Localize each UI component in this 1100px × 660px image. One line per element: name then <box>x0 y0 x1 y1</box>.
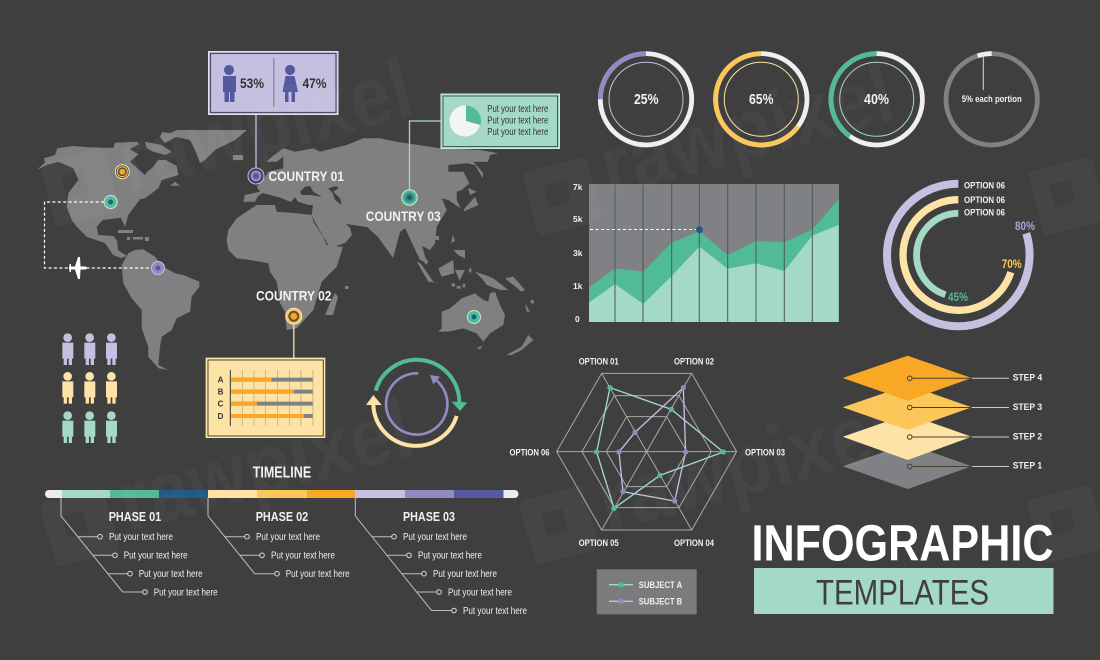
text: note lines: Put your text here <box>487 104 549 115</box>
label: country 02: COUNTRY 02 <box>256 288 332 304</box>
phase 01 <box>61 498 218 598</box>
panel: people pictograms <box>62 333 117 443</box>
labels: categories <box>218 376 224 421</box>
radar labels <box>510 356 785 548</box>
phase 03: Put your text here <box>448 586 512 598</box>
marker: green north america <box>104 196 117 208</box>
banner: templates: TEMPLATES <box>816 574 989 612</box>
stacked steps diagram: STEP 2 <box>1013 431 1042 442</box>
title: infographic: INFOGRAPHIC <box>752 514 1054 572</box>
text: note lines: Put your text here <box>487 127 549 138</box>
radial progress chart: OPTION 06 <box>964 180 1005 190</box>
chart: pie <box>450 106 481 136</box>
radar legend: SUBJECT A <box>639 580 683 590</box>
phase 03: PHASE 03 <box>403 509 455 524</box>
axis labels: 3k <box>573 248 583 258</box>
labels: categories: B <box>218 388 224 397</box>
series: subject A <box>594 385 726 511</box>
phase 01: Put your text here <box>124 550 188 562</box>
banner: templates <box>754 568 1054 614</box>
phase 02: Put your text here <box>271 550 335 562</box>
text: note lines <box>487 104 549 138</box>
label: country 03: COUNTRY 03 <box>366 208 441 224</box>
radar labels: OPTION 02 <box>674 356 714 366</box>
axis labels: 5k <box>573 214 583 224</box>
panel: bar chart <box>206 358 325 438</box>
marker: australia <box>468 310 480 324</box>
donut: 40 percent <box>831 54 922 145</box>
text: female share: 47% <box>302 75 327 91</box>
donut: 65 percent <box>716 54 807 145</box>
labels: categories: A <box>218 376 224 385</box>
timeline bar <box>45 490 518 498</box>
phase 02: PHASE 02 <box>256 509 308 524</box>
labels: categories: C <box>218 400 224 409</box>
radar labels: OPTION 04 <box>674 538 714 548</box>
watermark <box>33 41 1100 570</box>
marker: yellow north america <box>115 165 129 179</box>
phase 03 <box>355 498 527 617</box>
donut: 5 percent portion <box>946 54 1037 145</box>
stacked steps diagram: STEP 4 <box>1013 373 1043 384</box>
phase 03: Put your text here <box>403 531 467 543</box>
watermark: rawpixel <box>108 381 422 550</box>
radial progress chart: 70% <box>1002 257 1022 271</box>
panel: gender split <box>208 52 338 114</box>
phase 01: Put your text here <box>109 531 173 543</box>
radar labels: OPTION 03 <box>745 447 785 457</box>
icon: airplane <box>69 257 87 279</box>
phase 01: Put your text here <box>154 586 218 598</box>
icon: cycle arrows <box>366 360 467 446</box>
connector: country 02 <box>293 325 295 358</box>
radar labels: OPTION 01 <box>579 356 619 366</box>
radial progress chart: OPTION 06 <box>964 208 1005 218</box>
label: country 01: COUNTRY 01 <box>268 168 344 184</box>
radar labels: OPTION 05 <box>579 538 619 548</box>
radial progress chart: 80% <box>1015 219 1035 233</box>
icon: female figure <box>282 65 298 102</box>
watermark: rawpixel <box>108 41 422 210</box>
radar chart <box>557 373 737 530</box>
radar legend: SUBJECT B <box>639 596 683 606</box>
radial progress chart: OPTION 06 <box>964 195 1005 205</box>
panel: pie note <box>441 94 560 148</box>
radial progress chart: 45% <box>948 290 968 304</box>
phase 02: Put your text here <box>256 531 320 543</box>
phase 03: Put your text here <box>418 550 482 562</box>
stacked steps diagram <box>843 356 1043 489</box>
donut: 40 percent: 40% <box>864 91 889 108</box>
connector: route dashed line <box>44 202 152 268</box>
area chart <box>573 182 839 324</box>
marker: purple south america <box>152 262 164 274</box>
world map <box>37 130 534 370</box>
axis labels <box>573 182 583 324</box>
phase 02: Put your text here <box>286 568 350 580</box>
connector: country 03 <box>410 121 440 190</box>
marker: country 02 <box>286 308 302 324</box>
donut: 25 percent <box>600 54 692 145</box>
radial progress chart <box>887 180 1035 326</box>
text: male share: 53% <box>240 75 264 91</box>
phase 03: Put your text here <box>433 568 497 580</box>
donut: 65 percent: 65% <box>749 91 774 108</box>
marker: country 03 <box>402 190 417 205</box>
phase 01: PHASE 01 <box>109 509 161 524</box>
donut: 5 percent portion: 5% each portion <box>962 94 1022 105</box>
phase 03: Put your text here <box>463 605 527 617</box>
axis labels: 0 <box>575 314 580 324</box>
radar labels: OPTION 06 <box>510 447 550 457</box>
heading: timeline: TIMELINE <box>253 464 311 482</box>
phase 02 <box>208 498 350 580</box>
donut: 25 percent: 25% <box>634 91 658 108</box>
text: note lines: Put your text here <box>487 116 549 126</box>
watermark: rawpixel <box>588 381 902 550</box>
axis labels: 7k <box>573 182 583 192</box>
axis labels: 1k <box>573 281 583 291</box>
labels: categories: D <box>218 412 224 421</box>
series: subject B <box>616 385 688 504</box>
connector: country 01 <box>255 114 257 170</box>
stacked steps diagram: STEP 1 <box>1013 461 1043 472</box>
phase 01: Put your text here <box>139 568 203 580</box>
radar legend <box>597 569 697 614</box>
stacked steps diagram: STEP 3 <box>1013 402 1042 413</box>
watermark: rawpixel <box>589 46 904 215</box>
marker: country 01 <box>248 168 264 184</box>
icon: male figure <box>223 65 236 102</box>
